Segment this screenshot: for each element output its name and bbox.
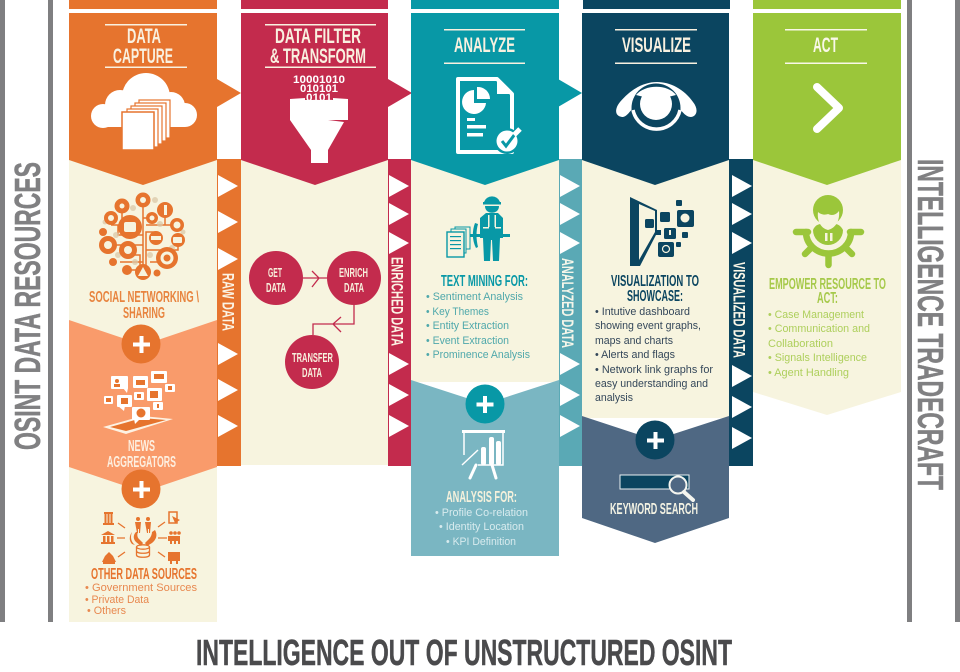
heading: data capture: DATA bbox=[127, 25, 161, 48]
text: empower resource: • Communication and bbox=[768, 323, 870, 335]
flow diagram: get, enrich, transfer data: ENRICH bbox=[339, 266, 368, 280]
text: visualization to showcase: VISUALIZATION TO bbox=[611, 273, 699, 290]
flow diagram: get, enrich, transfer data: TRANSFER bbox=[292, 351, 333, 365]
heading: act bbox=[785, 29, 867, 64]
icon: binary funnel: 0101 bbox=[306, 92, 332, 104]
text: visualization to showcase: easy understanding and bbox=[595, 378, 708, 390]
right side heading: INTELLIGENCE TRADECRAFT bbox=[910, 159, 951, 490]
label: social networking bbox=[89, 289, 199, 322]
sub-panel: news aggregators bbox=[69, 320, 217, 492]
heading: visualize: VISUALIZE bbox=[622, 34, 691, 57]
ribbon: raw data bbox=[217, 79, 241, 466]
text: text mining: • Sentiment Analysis bbox=[426, 291, 523, 303]
icon: news bubbles on tablet bbox=[103, 371, 175, 434]
text: visualization to showcase: showing event graphs, bbox=[595, 320, 701, 332]
text: empower resource: ACT: bbox=[817, 290, 838, 307]
text: empower resource: • Case Management bbox=[768, 309, 864, 321]
ribbon: raw data: RAW DATA bbox=[218, 273, 238, 331]
text: empower resource: • Signals Intelligence bbox=[768, 352, 867, 364]
ribbon: enriched data: ENRICHED DATA bbox=[388, 257, 406, 346]
icon: person in gear bbox=[796, 195, 861, 265]
text: visualization to showcase: • Network link graphs for bbox=[595, 364, 713, 376]
icon: eye bbox=[616, 82, 697, 132]
icon: plus bbox=[122, 470, 160, 508]
heading: analyze bbox=[444, 29, 525, 64]
flow diagram: get, enrich, transfer data: DATA bbox=[302, 366, 322, 380]
heading: data filter and transform bbox=[265, 24, 376, 68]
icon: presentation board bbox=[462, 430, 505, 478]
icon: text mining worker bbox=[447, 196, 510, 261]
label: news aggregators: NEWS bbox=[128, 438, 155, 455]
text: analysis for: • Profile Co-relation bbox=[435, 507, 528, 519]
text: empower resource: Collaboration bbox=[768, 338, 833, 350]
icon: binary funnel bbox=[290, 74, 348, 163]
text: visualization to showcase: • Intutive dashboard bbox=[595, 306, 690, 318]
text: analysis for bbox=[435, 489, 528, 548]
text: analysis for: • KPI Definition bbox=[446, 536, 516, 548]
text: visualization to showcase: SHOWCASE: bbox=[627, 288, 683, 305]
icon: plus bbox=[466, 384, 504, 424]
flow diagram: get, enrich, transfer data: DATA bbox=[344, 281, 364, 295]
text: analysis for: ANALYSIS FOR: bbox=[446, 489, 517, 506]
label: social networking: SOCIAL NETWORKING \ bbox=[89, 289, 199, 306]
text: visualization to showcase bbox=[595, 273, 713, 404]
heading: visualize bbox=[615, 29, 697, 64]
label: news aggregators: AGGREGATORS bbox=[107, 454, 176, 471]
ribbon: enriched data bbox=[388, 79, 412, 466]
icon: binary funnel: 010101 bbox=[300, 83, 338, 95]
text: analysis for: • Identity Location bbox=[439, 521, 524, 533]
text: text mining: • Entity Extraction bbox=[426, 320, 509, 332]
text: text mining: • Prominence Analysis bbox=[426, 349, 530, 361]
ribbon: analyzed data bbox=[558, 79, 582, 466]
heading: act: ACT bbox=[813, 34, 838, 57]
text: empower resource bbox=[768, 276, 886, 379]
icon: door with data bbox=[630, 197, 694, 266]
ribbon: visualized data bbox=[729, 159, 753, 466]
icon: other data sources bbox=[101, 512, 181, 564]
icon: social network tree bbox=[99, 192, 186, 280]
text: other data sources: • Others bbox=[87, 605, 126, 617]
text: other data sources bbox=[85, 566, 198, 617]
sub-panel: keyword search bbox=[582, 416, 729, 543]
left side heading: OSINT DATA RESOURCES bbox=[7, 162, 48, 450]
label: social networking: SHARING bbox=[123, 305, 165, 322]
flow diagram: get, enrich, transfer data bbox=[249, 251, 381, 389]
icon: plus bbox=[122, 324, 160, 364]
text: empower resource: • Agent Handling bbox=[768, 367, 849, 379]
sub-panel: analysis bbox=[411, 380, 559, 556]
text: text mining bbox=[426, 273, 530, 361]
label: keyword search: KEYWORD SEARCH bbox=[610, 501, 698, 518]
icon: chevron bbox=[817, 87, 839, 129]
heading: data capture: CAPTURE bbox=[113, 45, 173, 68]
icon: cloud with documents bbox=[91, 73, 197, 150]
text: text mining: • Key Themes bbox=[426, 306, 489, 318]
text: visualization to showcase: • Alerts and flags bbox=[595, 349, 675, 361]
panel: act bbox=[753, 0, 901, 415]
text: visualization to showcase: maps and charts bbox=[595, 335, 673, 347]
icon: report with check bbox=[458, 79, 521, 154]
heading: data filter and transform: & TRANSFORM bbox=[270, 45, 366, 68]
text: text mining: TEXT MINING FOR: bbox=[441, 273, 528, 290]
icon: binary funnel: 10001010 bbox=[293, 74, 345, 86]
text: text mining: • Event Extraction bbox=[426, 335, 509, 347]
label: news aggregators bbox=[107, 438, 176, 471]
icon: search bar bbox=[620, 475, 693, 500]
panel: analyze bbox=[411, 0, 559, 556]
text: visualization to showcase: analysis bbox=[595, 392, 633, 404]
text: other data sources: • Private Data bbox=[85, 594, 150, 606]
ribbon: analyzed data: ANALYZED DATA bbox=[558, 258, 577, 348]
heading: data filter and transform: DATA FILTER bbox=[275, 25, 361, 48]
icon: plus bbox=[636, 420, 674, 460]
panel: visualize bbox=[582, 0, 730, 543]
panel: data filter and transform bbox=[241, 0, 388, 465]
flow diagram: get, enrich, transfer data: DATA bbox=[266, 281, 286, 295]
flow diagram: get, enrich, transfer data: GET bbox=[268, 266, 282, 280]
text: other data sources: OTHER DATA SOURCES bbox=[91, 566, 197, 583]
ribbon: visualized data: VISUALIZED DATA bbox=[730, 262, 748, 358]
text: other data sources: • Government Sources bbox=[85, 582, 198, 594]
heading: data capture bbox=[105, 24, 187, 68]
panel: data capture bbox=[69, 0, 217, 622]
heading: analyze: ANALYZE bbox=[454, 34, 515, 57]
